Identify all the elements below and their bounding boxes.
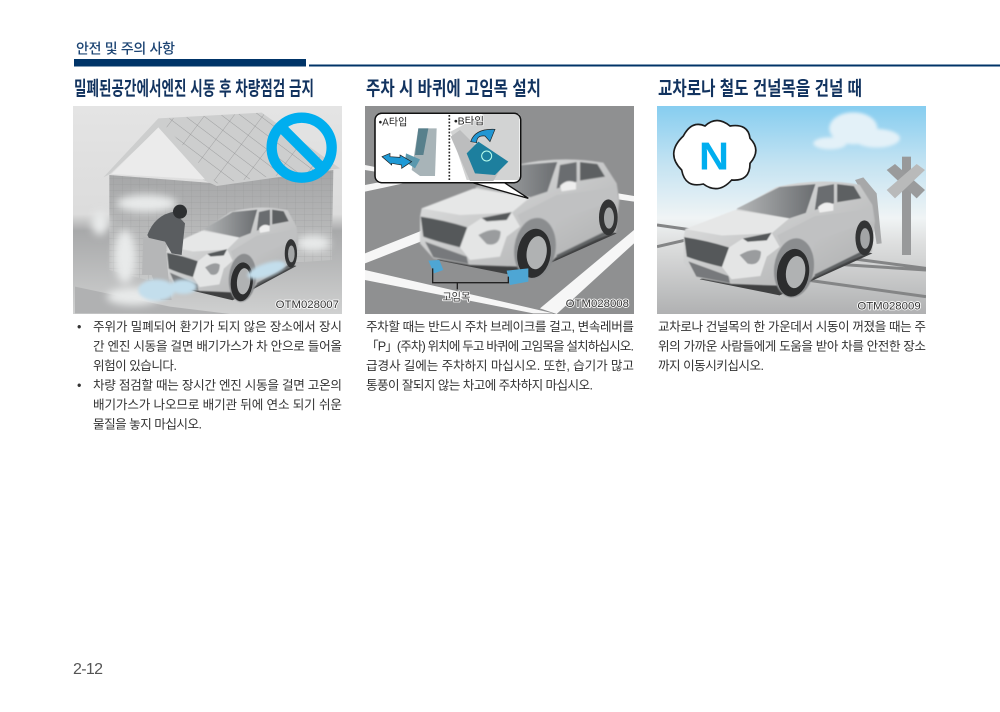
body text: 교차로나 건널목의 한 가운데서 시동이 꺼졌을 때는 주 [658, 320, 926, 334]
thought bubble: N [699, 135, 729, 178]
code label: OTM028009 [857, 300, 921, 312]
icon: cloud [813, 112, 900, 149]
body text [658, 320, 926, 373]
bulleted text: 주위가 밀폐되어 환기가 되지 않은 장소에서 장시 [93, 320, 342, 334]
body text: 「P」(주차) 위치에 두고 바퀴에 고임목을 설치하십시오. [366, 340, 634, 354]
section header: 안전 및 주의 사항 [76, 40, 175, 56]
illustration: car on crossing [657, 106, 926, 314]
body text: 까지 이동시키십시오. [658, 359, 764, 373]
panel: enclosed space [73, 78, 342, 432]
chock label: 고임목 [442, 291, 470, 304]
bulleted text: 간 엔진 시동을 걸면 배기가스가 차 안으로 들어올 [93, 340, 342, 354]
illustration: car in garage [73, 106, 342, 314]
code label: OTM028007 [276, 299, 339, 311]
section header [74, 40, 1000, 66]
illustration: parked car with chocks [365, 106, 634, 314]
crossing sign [887, 157, 925, 255]
heading: railway crossing: 교차로나 철도 건널목을 건널 때 [658, 78, 862, 100]
callout: inset [375, 113, 528, 198]
code label: OTM028008 [566, 298, 629, 310]
body text [366, 320, 634, 392]
bulleted text: 물질을 놓지 마십시오. [93, 418, 202, 432]
type A label: •A타입 [379, 116, 407, 129]
bulleted text: • [77, 320, 81, 334]
bulleted text [77, 320, 342, 432]
thought bubble [674, 120, 756, 189]
body text: 위의 가까운 사람들에게 도움을 받아 차를 안전한 장소 [658, 340, 926, 354]
heading: enclosed space: 밀폐된공간에서엔진 시동 후 차량점검 금지 [74, 78, 314, 100]
bulleted text: • [77, 378, 81, 392]
page number: 2-12 [73, 661, 103, 678]
bulleted text: 차량 점검할 때는 장시간 엔진 시동을 걸면 고온의 [93, 378, 342, 392]
panel: wheel chocks [365, 78, 634, 392]
body text: 주차할 때는 반드시 주차 브레이크를 걸고, 변속레버를 [366, 320, 634, 334]
heading: wheel chocks: 주차 시 바퀴에 고임목 설치 [366, 78, 541, 100]
body text: 통풍이 잘되지 않는 차고에 주차하지 마십시오. [366, 378, 593, 392]
person [855, 177, 882, 244]
type B label: •B타입 [454, 115, 484, 128]
bulleted text: 위험이 있습니다. [93, 359, 177, 373]
panel: railway crossing [657, 78, 926, 373]
icon: prohibition sign [272, 118, 332, 178]
body text: 급경사 길에는 주차하지 마십시오. 또한, 습기가 많고 [366, 359, 634, 373]
bulleted text: 배기가스가 나오므로 배기관 뒤에 연소 되기 쉬운 [93, 398, 342, 412]
